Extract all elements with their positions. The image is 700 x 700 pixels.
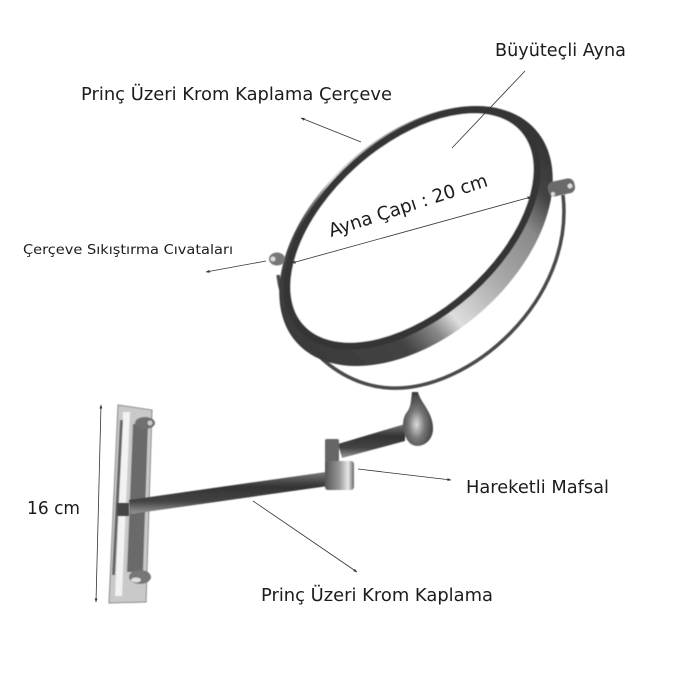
light stripe [115, 412, 130, 596]
swing arm [117, 392, 433, 516]
arrow: frame [301, 118, 361, 142]
arrow: joint [358, 469, 451, 480]
arm base nut [117, 503, 129, 516]
movable joint [325, 439, 354, 490]
label: plate height: 16 cm [27, 499, 80, 519]
slot [112, 420, 123, 575]
dark channel [127, 424, 148, 572]
lower bolt [129, 570, 151, 584]
upper arm [338, 424, 405, 458]
arrow: plate height [96, 405, 101, 602]
label: mirror diameter: Ayna Çapı : 20 cm [326, 170, 490, 242]
label: frame: Prinç Üzeri Krom Kaplama Çerçeve [81, 83, 392, 105]
ball head [403, 392, 433, 446]
arrow: chrome arm [253, 501, 357, 572]
back support ring [278, 195, 564, 388]
left clamping bolt [269, 252, 285, 266]
arrows [96, 71, 531, 602]
upper bolt [135, 417, 155, 429]
right clamping bolt [547, 177, 576, 198]
long arm [129, 472, 328, 514]
label: chrome arm: Prinç Üzeri Krom Kaplama [261, 584, 493, 606]
wall mounting plate [109, 405, 155, 603]
mirror side band [230, 55, 602, 417]
label: magnifying mirror: Büyüteçli Ayna [495, 41, 626, 61]
arrow: magnifying mirror [452, 71, 525, 148]
plate body [109, 405, 152, 603]
arrow: clamping bolts [206, 261, 266, 272]
arrow: mirror diameter [292, 197, 531, 263]
label: clamping bolts: Çerçeve Sıkıştırma Cıvataları [23, 242, 233, 258]
mirror assembly [230, 55, 602, 417]
mirror rim [244, 65, 580, 391]
label: joint: Hareketli Mafsal [466, 478, 609, 498]
